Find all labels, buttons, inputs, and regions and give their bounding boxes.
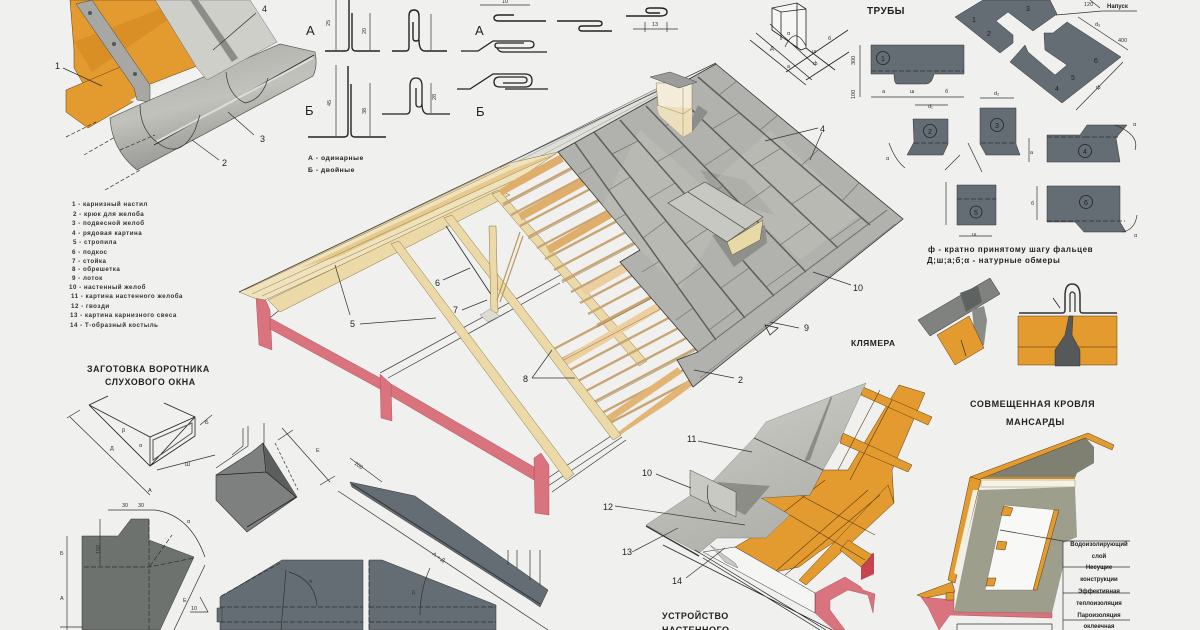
legend: mansard layers: конструкции bbox=[1080, 577, 1118, 583]
masonry bbox=[815, 553, 875, 630]
diagram: dormer collar isometric: α bbox=[139, 443, 143, 449]
diagonal rafters bbox=[391, 215, 621, 480]
sheet 4: 4 bbox=[1083, 149, 1087, 156]
diagram: seam profiles: 38 bbox=[362, 108, 368, 114]
legend: numbered parts list: 11 - картина настенного желоба bbox=[71, 293, 183, 300]
metal roof sheets bbox=[558, 64, 903, 387]
diagram: seam profiles: 45 bbox=[327, 100, 333, 106]
legend: numbered parts list: 3 - подвесной желоб bbox=[72, 220, 145, 227]
dimension lines: ш bbox=[972, 232, 977, 238]
dimension lines: а bbox=[1030, 150, 1034, 156]
timber bbox=[735, 385, 932, 585]
diagram: flat collar blank: Е bbox=[183, 598, 187, 604]
sheet 6 bbox=[1047, 186, 1126, 232]
callouts: 4 bbox=[820, 124, 825, 134]
diagram: chimney dimensions: ш bbox=[812, 49, 817, 55]
heading: dormer collar blank: ЗАГОТОВКА ВОРОТНИКА bbox=[87, 364, 210, 374]
legend: mansard layers: Водоизолирующий bbox=[1070, 541, 1128, 548]
diagram: seam profiles: А bbox=[475, 23, 484, 38]
diagram: dormer collar isometric: Б bbox=[205, 420, 209, 426]
diagram: dormer collar isometric: А bbox=[148, 488, 152, 494]
caption: seam types: А - одинарные bbox=[308, 155, 364, 162]
diagram: chimney dimensions: б bbox=[828, 36, 831, 42]
legend: numbered parts list bbox=[69, 201, 183, 329]
heading: wall gutter device bbox=[662, 610, 730, 630]
diagram: chimney dimensions: ф bbox=[813, 61, 818, 67]
sheet 2 bbox=[907, 119, 948, 155]
legend: mansard layers: оклеечная bbox=[1084, 624, 1115, 630]
diagram: flat collar blank bbox=[60, 503, 205, 630]
callouts: 8 bbox=[523, 374, 528, 384]
label: callouts: 2 bbox=[222, 158, 227, 168]
callouts: 6 bbox=[435, 278, 440, 288]
sheet 1 bbox=[871, 45, 964, 84]
eaves strips bbox=[663, 545, 832, 630]
callouts: 9 bbox=[804, 323, 809, 333]
legend: numbered parts list: 13 - картина карнизного свеса bbox=[70, 312, 177, 319]
dimension lines: d₂ bbox=[994, 91, 999, 97]
developed sheet: 6 bbox=[1094, 58, 1098, 65]
dormer bbox=[668, 182, 767, 267]
diagram: dormer collar isometric: Ш bbox=[185, 462, 190, 468]
caption: seam types: Б - двойные bbox=[308, 166, 355, 174]
developed sheet: 5 bbox=[1071, 75, 1075, 82]
diagram: flat collar blank: α bbox=[187, 519, 191, 525]
sheet 5: 5 bbox=[974, 210, 978, 217]
dimension lines: б bbox=[945, 89, 948, 95]
callouts: 10 bbox=[642, 468, 652, 478]
floor lines bbox=[267, 273, 626, 492]
diagram: chimney dimensions bbox=[750, 3, 849, 85]
diagram: chimney sheet blanks bbox=[851, 0, 1138, 265]
battens and boards bbox=[499, 154, 696, 434]
diagram: blue blanks bottom: 10 bbox=[191, 606, 197, 612]
callouts: 11 bbox=[687, 434, 696, 444]
legend: numbered parts list: 1 - карнизный настил bbox=[72, 201, 148, 208]
developed sheet: 2 bbox=[987, 31, 991, 38]
legend: numbered parts list: 7 - стойка bbox=[72, 258, 107, 265]
callouts bbox=[335, 124, 863, 385]
diagram: chimney dimensions: Д bbox=[770, 46, 774, 52]
dimension lines: α bbox=[1134, 233, 1138, 239]
heading: mansard roof bbox=[970, 399, 1095, 427]
developed sheet: 120 bbox=[1084, 2, 1093, 8]
callouts: 2 bbox=[738, 375, 743, 385]
developed sheet: d₃ bbox=[1095, 22, 1100, 28]
dimension lines bbox=[851, 45, 1138, 239]
diagram: long blue strip bbox=[338, 458, 548, 630]
diagram: seam profiles: 28 bbox=[432, 94, 438, 100]
callouts: 5 bbox=[350, 319, 355, 329]
sheet 2: 2 bbox=[928, 129, 932, 136]
heading: dormer collar blank: СЛУХОВОГО ОКНА bbox=[105, 377, 196, 387]
label: callouts: 1 bbox=[55, 61, 60, 71]
legend: numbered parts list: 4 - рядовая картина bbox=[72, 230, 142, 237]
dimension lines: 100 bbox=[851, 90, 857, 99]
diagram: flat collar blank: 30 bbox=[138, 503, 144, 509]
dimension lines: α bbox=[886, 156, 890, 162]
wall and floor beam bbox=[256, 294, 549, 515]
caption: seam types bbox=[308, 155, 364, 174]
illustration: eaves gutter bbox=[55, 0, 316, 190]
diagram: seam profiles: 13 bbox=[652, 22, 658, 28]
developed sheet: Напуск bbox=[1107, 4, 1128, 10]
developed sheet: ф bbox=[1096, 85, 1101, 91]
sheet 1: 1 bbox=[881, 56, 885, 63]
diagram: flat collar blank: Б bbox=[60, 551, 64, 557]
dimension lines: б bbox=[1031, 201, 1034, 207]
legend: mansard layers: Несущие bbox=[1086, 565, 1113, 571]
callouts: 7 bbox=[453, 305, 458, 315]
main illustration: gable roof structure bbox=[239, 63, 903, 515]
legend: numbered parts list: 6 - подкос bbox=[72, 249, 108, 256]
illustration: cleat sections bbox=[918, 278, 1117, 366]
developed sheet: 4 bbox=[1055, 86, 1059, 93]
legend: mansard layers: Пароизоляция bbox=[1077, 613, 1121, 619]
developed sheet: 1 bbox=[972, 17, 976, 24]
legend: numbered parts list: 12 - гвозди bbox=[71, 303, 110, 310]
dimension lines: а bbox=[882, 89, 886, 95]
heading: wall gutter device: УСТРОЙСТВО bbox=[662, 610, 729, 621]
developed sheet bbox=[955, 0, 1137, 110]
diagram: seam profiles bbox=[305, 0, 678, 174]
legend: mansard layers: теплоизоляция bbox=[1076, 601, 1122, 607]
sheet 4 bbox=[1047, 125, 1127, 162]
dimension lines: α bbox=[1133, 122, 1137, 128]
callouts: 14 bbox=[672, 576, 682, 586]
diagram: seam profiles: А bbox=[306, 23, 315, 38]
diagram: chimney dimensions: а bbox=[787, 64, 791, 70]
label: callouts bbox=[55, 4, 267, 168]
label: callouts: 3 bbox=[260, 134, 265, 144]
heading: pipes: ТРУБЫ bbox=[867, 6, 905, 17]
callouts: 12 bbox=[603, 502, 613, 512]
legend: numbered parts list: 14 - Т-образный костыль bbox=[70, 322, 158, 329]
chimney bbox=[650, 72, 708, 137]
developed sheet: 400 bbox=[1118, 38, 1127, 44]
legend: mansard layers: Эффективная bbox=[1078, 588, 1120, 595]
dimension lines: d₁ bbox=[928, 104, 933, 110]
formula note: Д;ш;а;б;α - натурные обмеры bbox=[927, 256, 1060, 265]
diagram: collar folded: Е bbox=[316, 448, 320, 454]
diagram: blue blanks bottom bbox=[190, 560, 496, 630]
callouts bbox=[603, 434, 752, 586]
sheet 11 bbox=[646, 383, 866, 556]
legend: numbered parts list: 8 - обрешетка bbox=[72, 266, 120, 273]
heading: dormer collar blank bbox=[87, 364, 210, 387]
diagram: long blue strip: 100 bbox=[353, 461, 364, 471]
diagram: long blue strip: А + Д bbox=[431, 552, 446, 564]
diagram: dormer collar isometric bbox=[67, 396, 215, 495]
diagram: seam profiles: Б bbox=[476, 104, 485, 119]
diagram: dormer collar isometric: β bbox=[122, 428, 125, 434]
diagram: flat collar blank: 30 bbox=[122, 503, 128, 509]
diagram: blue blanks bottom: α bbox=[309, 579, 313, 585]
dimension lines: ш bbox=[910, 89, 915, 95]
sheet 3: 3 bbox=[995, 123, 999, 130]
legend: mansard layers bbox=[1070, 541, 1128, 630]
diagram: flat collar blank: А bbox=[60, 596, 64, 602]
sheet 6: 6 bbox=[1084, 200, 1088, 207]
legend: numbered parts list: 9 - лоток bbox=[72, 275, 103, 282]
diagram: collar folded bbox=[216, 423, 335, 532]
dimension lines: 300 bbox=[851, 56, 857, 65]
sheet 5 bbox=[957, 185, 996, 225]
formula note: ф - кратно принятому шагу фальцев bbox=[928, 245, 1093, 254]
legend: numbered parts list: 10 - настенный желоб bbox=[69, 284, 146, 291]
formula note bbox=[927, 245, 1093, 265]
callouts: 13 bbox=[622, 547, 632, 557]
sheet 3 bbox=[980, 108, 1020, 155]
illustration: mansard section bbox=[917, 433, 1130, 630]
legend: numbered parts list: 5 - стропила bbox=[73, 239, 117, 246]
diagram: dormer collar isometric: Д bbox=[110, 446, 114, 452]
diagram: seam profiles: Б bbox=[305, 103, 314, 118]
illustration: wall gutter detail bbox=[603, 383, 932, 630]
callouts: 10 bbox=[853, 283, 863, 293]
developed sheet: 3 bbox=[1026, 6, 1030, 13]
diagram: flat collar blank: 150 bbox=[96, 545, 102, 554]
legend: mansard layers: слой bbox=[1092, 553, 1107, 560]
diagram: seam profiles: 20 bbox=[362, 28, 368, 34]
diagram: blue blanks bottom: β bbox=[412, 590, 415, 596]
rafters and ridge bbox=[239, 63, 716, 312]
label: callouts: 4 bbox=[262, 4, 267, 14]
diagram: seam profiles: 25 bbox=[326, 20, 332, 26]
legend: numbered parts list: 2 - крюк для желоба bbox=[73, 211, 144, 218]
heading: mansard roof: СОВМЕЩЕННАЯ КРОВЛЯ bbox=[970, 399, 1095, 409]
heading: cleats: КЛЯМЕРА bbox=[851, 338, 896, 348]
diagram: chimney dimensions: α bbox=[787, 31, 791, 37]
heading: mansard roof: МАНСАРДЫ bbox=[1006, 417, 1065, 427]
diagonal rafters behind battens bbox=[492, 191, 647, 366]
